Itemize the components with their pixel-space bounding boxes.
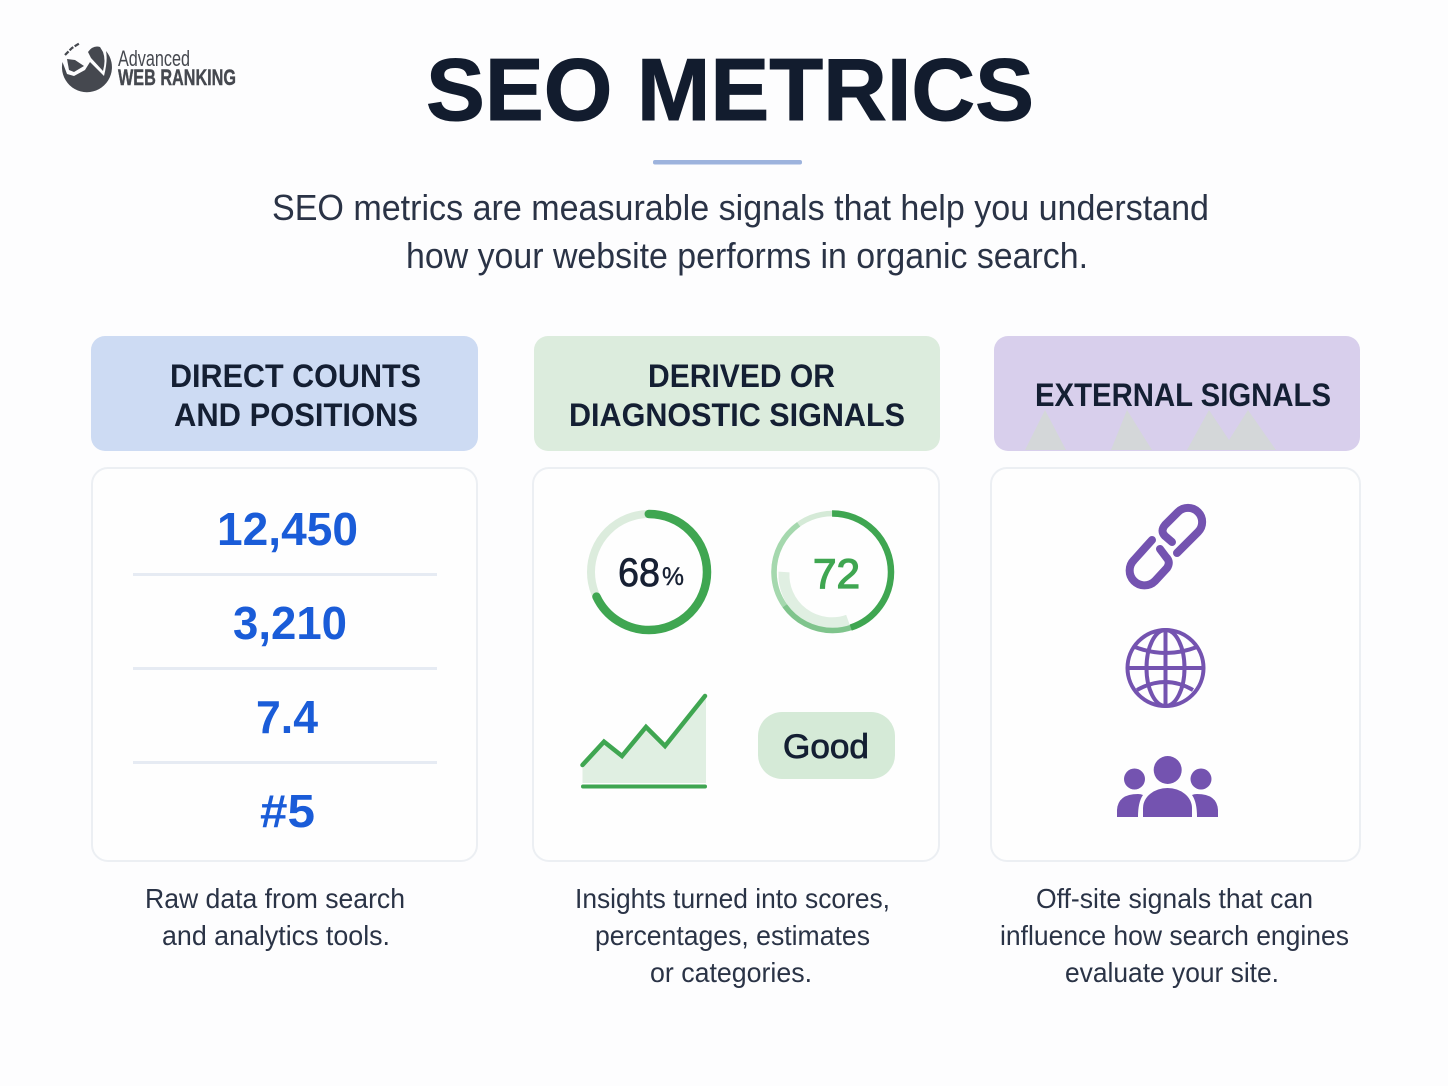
caption: derived signals: percentages, estimates — [595, 920, 870, 951]
heading: derived signals: DIAGNOSTIC SIGNALS — [569, 397, 905, 433]
heading: external signals: EXTERNAL SIGNALS — [1035, 377, 1331, 413]
logo: Advanced Web Ranking — [62, 43, 236, 92]
gauge: score 72: 72 — [813, 550, 860, 597]
icon: people — [1117, 756, 1218, 817]
icon: chain link — [1130, 508, 1202, 585]
metric: #5: #5 — [260, 785, 315, 837]
badge: Good: Good — [783, 728, 869, 766]
caption: external signals: influence how search engines — [1000, 920, 1349, 951]
intro text: how your website performs in organic search. — [406, 235, 1088, 276]
heading: derived signals: DERIVED OR — [648, 358, 835, 394]
panel: counts — [92, 468, 477, 861]
badge: Good — [758, 712, 895, 779]
panel: diagnostics — [533, 468, 939, 861]
metric: 3,210: 3,210 — [233, 597, 347, 649]
gauge: score 72 — [774, 514, 891, 630]
caption: direct counts — [145, 883, 405, 951]
gauge: 68 percent: 68 — [618, 551, 660, 595]
panel: external icons — [991, 468, 1360, 861]
caption: direct counts: and analytics tools. — [162, 920, 390, 951]
caption: derived signals: or categories. — [650, 957, 812, 988]
heading: external signals — [994, 336, 1360, 451]
heading: derived signals — [534, 336, 940, 451]
title: SEO METRICS — [426, 40, 1034, 139]
caption: external signals: evaluate your site. — [1065, 957, 1279, 988]
logo: Advanced Web Ranking: WEB RANKING — [118, 65, 236, 90]
gauge: 68 percent: % — [662, 563, 684, 591]
column: derived or diagnostic signals — [533, 336, 940, 988]
metric: 7.4: 7.4 — [256, 691, 318, 743]
title underline — [653, 160, 802, 164]
heading: direct counts — [91, 336, 478, 451]
intro text — [272, 187, 1209, 276]
gauge: 68 percent — [591, 514, 707, 630]
icon: globe — [1128, 630, 1204, 706]
caption: external signals — [1000, 883, 1349, 988]
heading: direct counts: DIRECT COUNTS — [170, 358, 421, 394]
caption: external signals: Off-site signals that can — [1036, 883, 1313, 914]
caption: direct counts: Raw data from search — [145, 883, 405, 914]
column: direct counts and positions — [91, 336, 478, 951]
metric: 12,450: 12,450 — [217, 503, 358, 555]
logo: Advanced Web Ranking: Advanced — [118, 46, 190, 71]
intro text: SEO metrics are measurable signals that help you understand — [272, 187, 1209, 228]
heading: direct counts: AND POSITIONS — [174, 397, 418, 433]
caption: derived signals — [575, 883, 890, 988]
caption: derived signals: Insights turned into scores, — [575, 883, 890, 914]
column: external signals — [991, 336, 1360, 988]
trend chart — [581, 696, 707, 788]
